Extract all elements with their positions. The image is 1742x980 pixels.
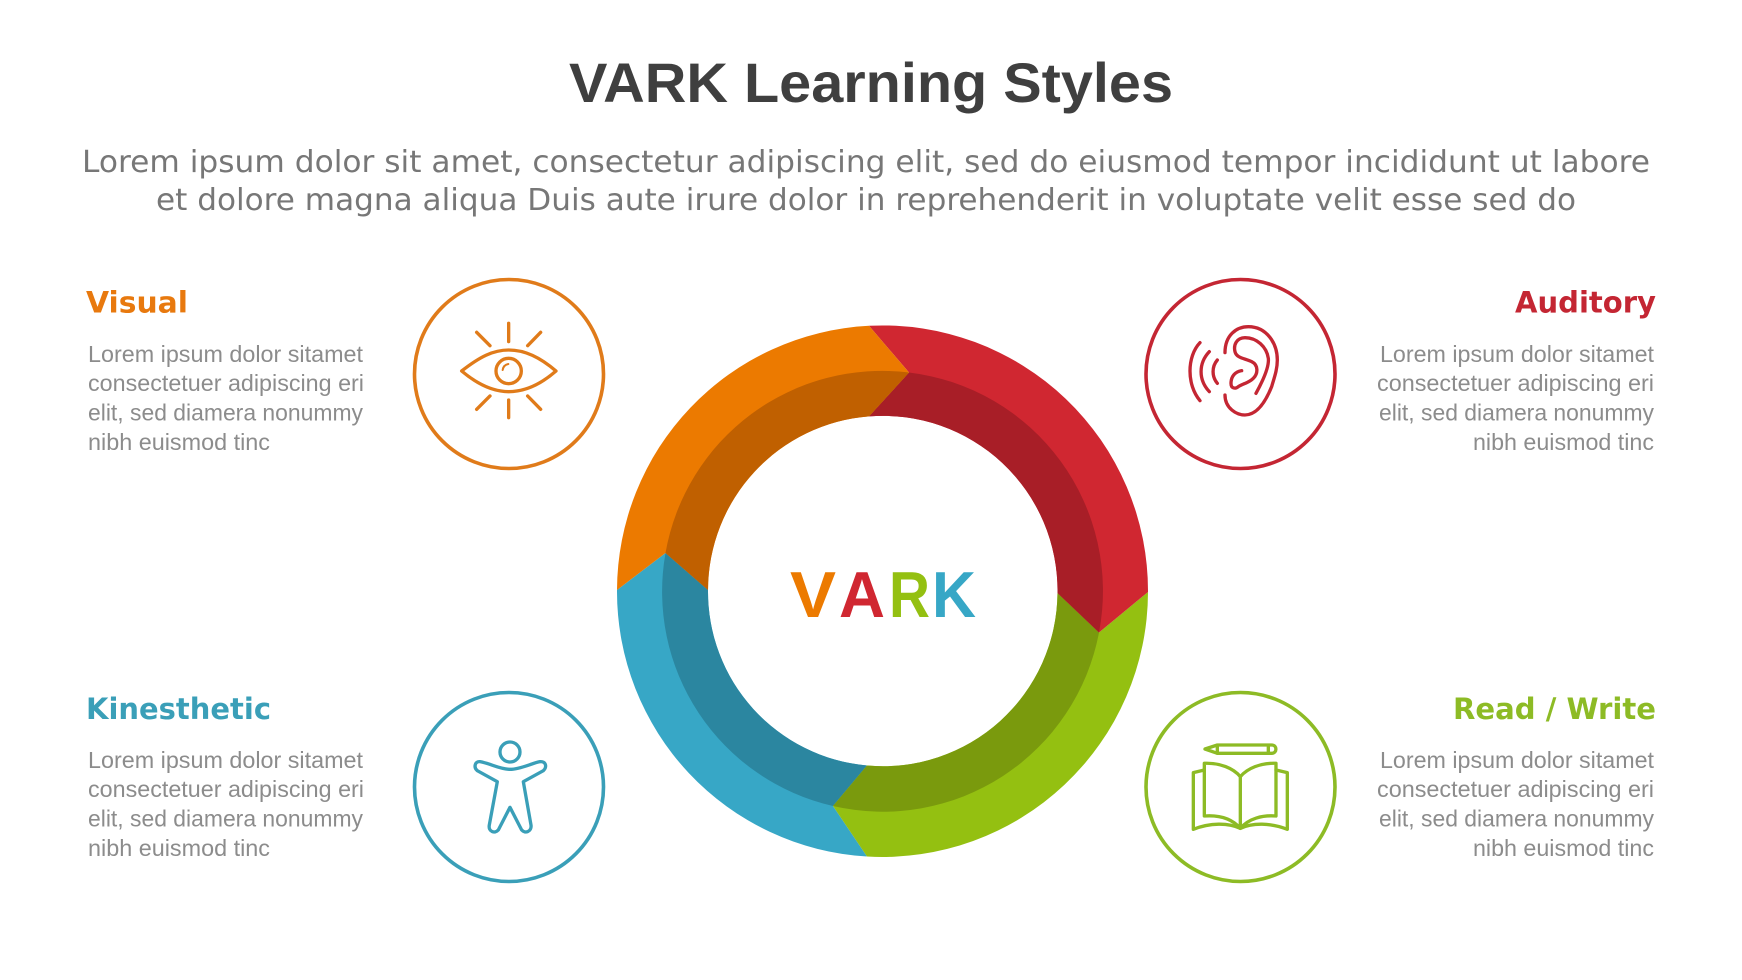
text block: read / write: nibh euismod tinc: [1473, 835, 1654, 861]
heading: read / write: Read / Write: [1453, 692, 1656, 726]
subtitle text block: [82, 145, 1650, 218]
text block: visual: nibh euismod tinc: [88, 429, 270, 455]
text block: kinesthetic: elit, sed diamera nonummy: [88, 806, 363, 832]
icon: person: [475, 742, 546, 832]
center label VARK: K: [932, 558, 976, 631]
panel: auditory: [1146, 280, 1656, 468]
subtitle text block: et dolore magna aliqua Duis aute irure dolor in reprehenderit in voluptate velit esse sed do: [156, 183, 1576, 218]
text block: kinesthetic: [88, 747, 364, 861]
subtitle text block: Lorem ipsum dolor sit amet, consectetur adipiscing elit, sed do eiusmod tempor incididunt ut labore: [82, 145, 1650, 180]
ring segment: blue: [617, 553, 867, 856]
icon: book and pencil: [1193, 745, 1287, 829]
icon circle: visual: [414, 280, 604, 468]
central ring diagram: [617, 325, 1148, 857]
title: VARK Learning Styles: [569, 51, 1173, 114]
text block: auditory: [1377, 341, 1654, 455]
text block: visual: [88, 341, 364, 455]
ring segment: red: [869, 325, 1148, 632]
panel: read / write: [1146, 692, 1656, 882]
text block: read / write: Lorem ipsum dolor sitamet: [1380, 747, 1654, 773]
text block: read / write: consectetuer adipiscing eri: [1377, 776, 1654, 802]
icon circle: read / write: [1146, 692, 1335, 882]
text block: auditory: consectetuer adipiscing eri: [1377, 370, 1654, 396]
icon circle: auditory: [1146, 280, 1335, 468]
ring segment: green: [833, 592, 1148, 857]
text block: auditory: elit, sed diamera nonummy: [1379, 400, 1654, 426]
text block: visual: elit, sed diamera nonummy: [88, 400, 363, 426]
center label VARK: V: [790, 558, 836, 631]
text block: kinesthetic: Lorem ipsum dolor sitamet: [88, 747, 363, 773]
center label VARK: R: [889, 558, 930, 631]
heading: auditory: Auditory: [1515, 286, 1656, 320]
center label VARK: A: [839, 558, 885, 631]
text block: visual: Lorem ipsum dolor sitamet: [88, 341, 363, 367]
icon circle: kinesthetic: [414, 692, 604, 882]
panel: visual: [86, 280, 604, 468]
panel: kinesthetic: [86, 692, 604, 882]
text block: read / write: [1377, 747, 1654, 861]
ring segment: orange: [617, 326, 909, 590]
text block: read / write: elit, sed diamera nonummy: [1379, 806, 1654, 832]
heading: kinesthetic: Kinesthetic: [86, 692, 271, 726]
icon: eye: [462, 323, 556, 418]
icon: ear: [1190, 327, 1277, 415]
text block: auditory: nibh euismod tinc: [1473, 429, 1654, 455]
text block: kinesthetic: nibh euismod tinc: [88, 835, 270, 861]
text block: kinesthetic: consectetuer adipiscing eri: [88, 776, 364, 802]
text block: visual: consectetuer adipiscing eri: [88, 370, 364, 396]
heading: visual: Visual: [86, 286, 188, 320]
text block: auditory: Lorem ipsum dolor sitamet: [1380, 341, 1654, 367]
